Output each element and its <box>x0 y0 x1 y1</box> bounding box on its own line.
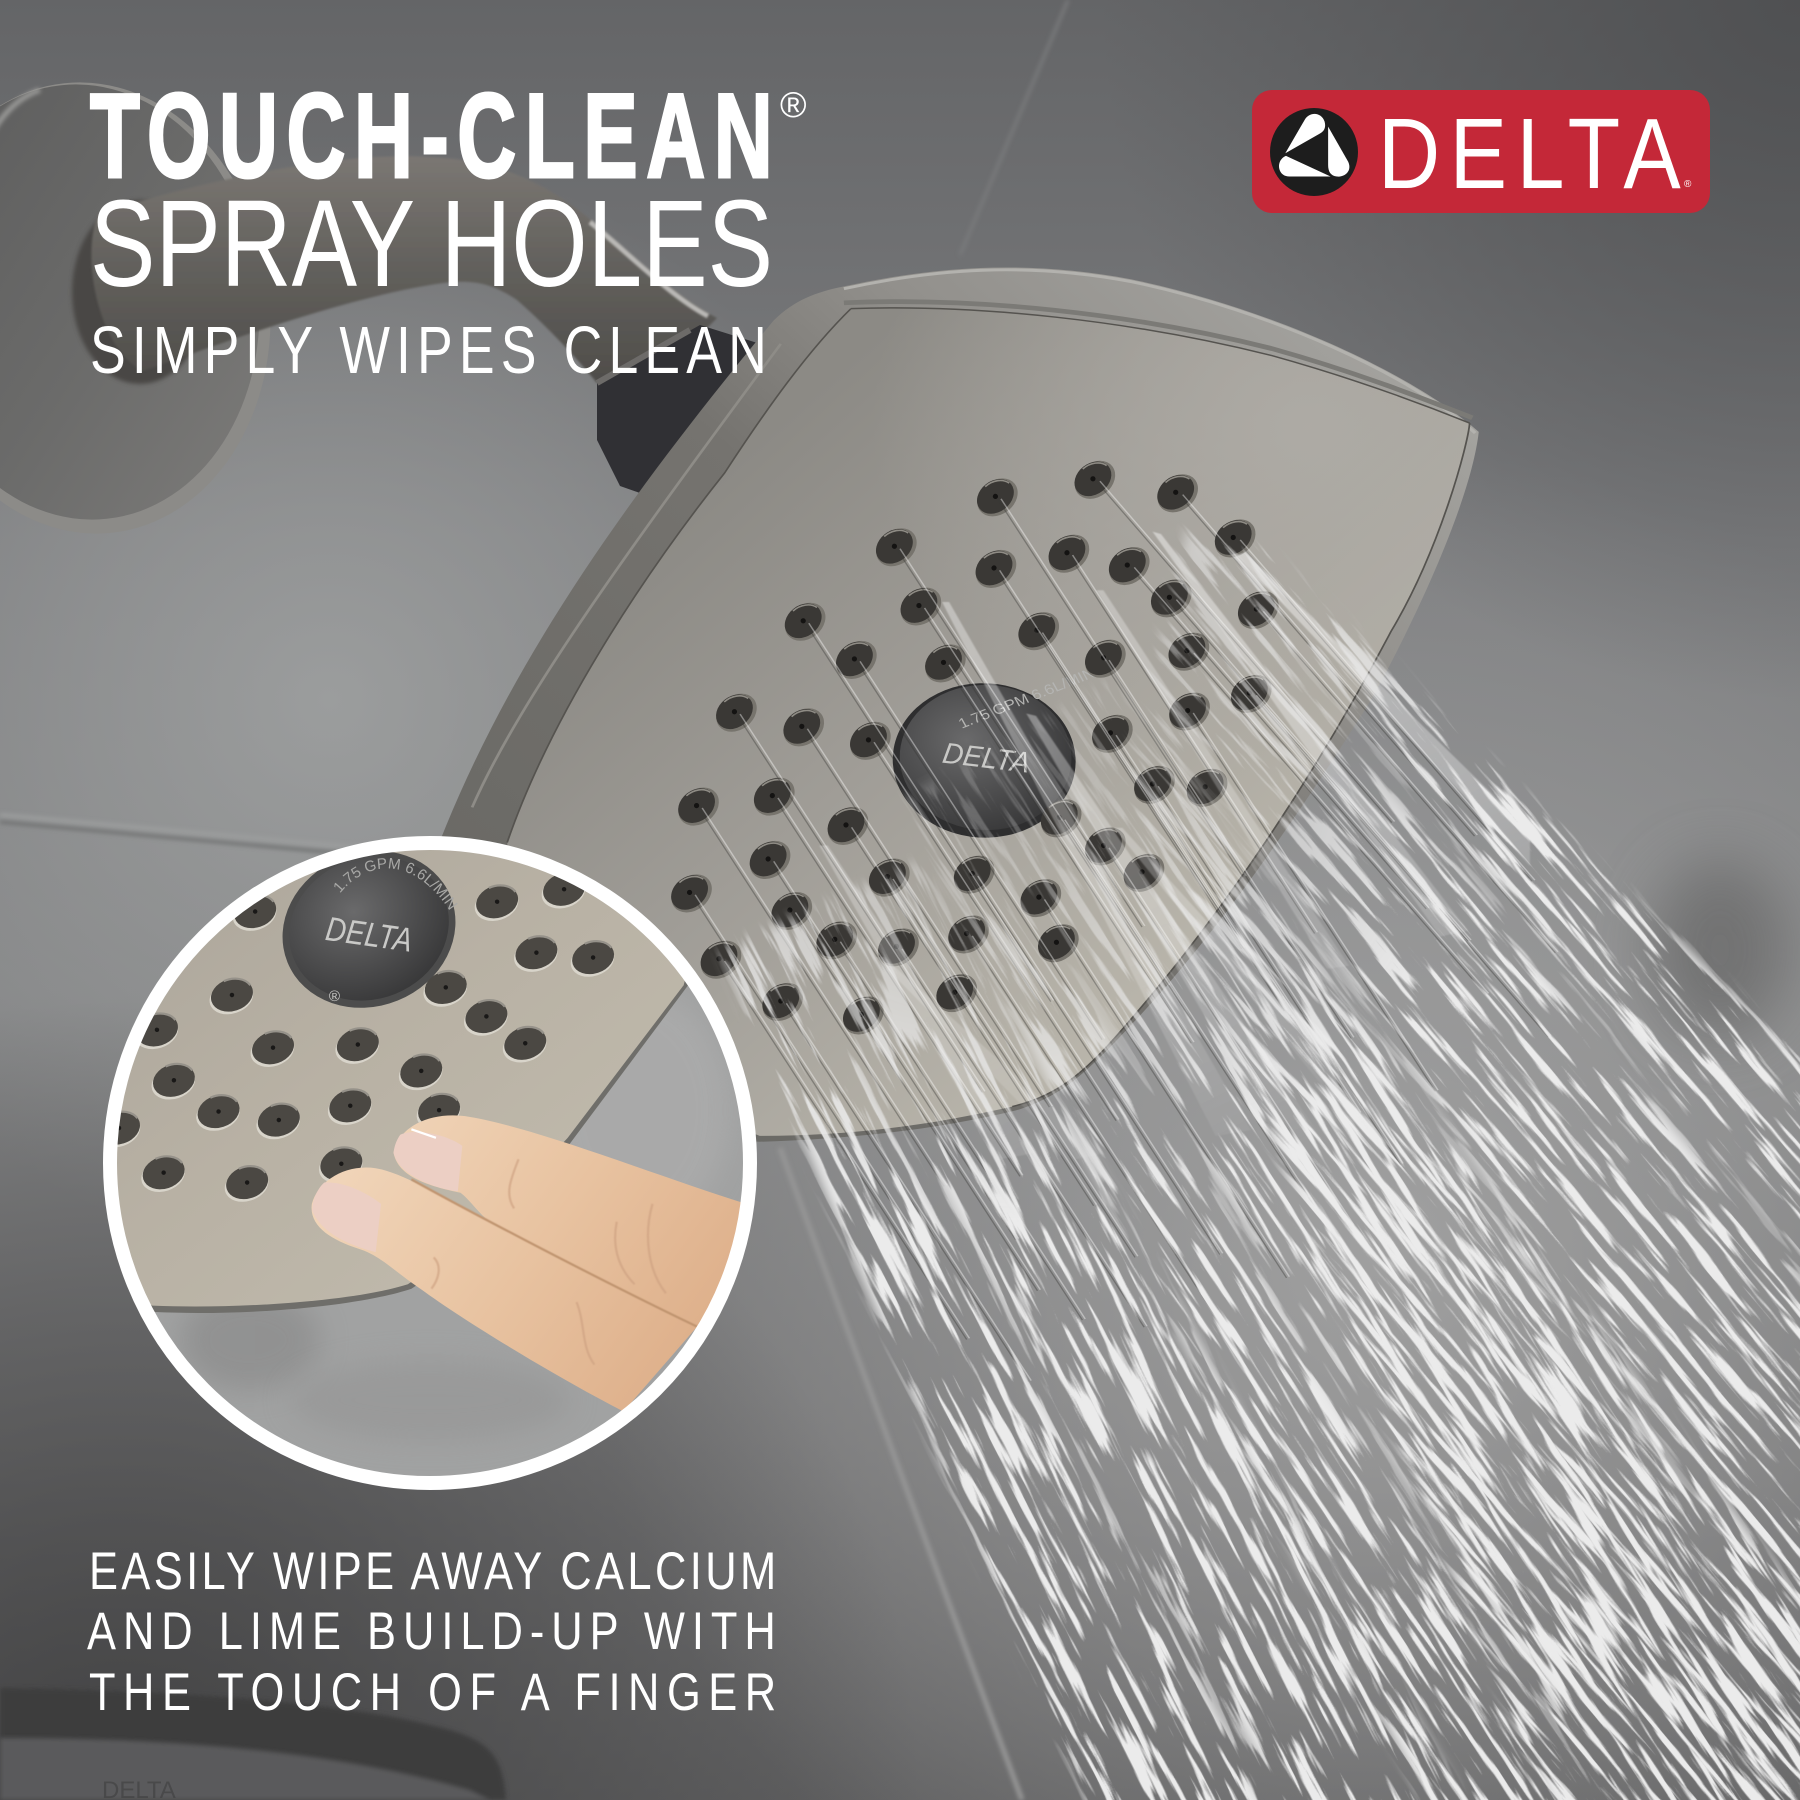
bezel highlights <box>472 270 1475 807</box>
inset spray nozzles <box>92 867 619 1207</box>
subtitle: SIMPLY WIPES CLEAN <box>90 312 767 387</box>
line 3: THE TOUCH OF A FINGER <box>89 1663 776 1722</box>
inset badge <box>282 852 458 1008</box>
line 1: EASILY WIPE AWAY CALCIUM <box>89 1542 776 1601</box>
spray nozzles <box>663 452 1286 1042</box>
inset circle: fingers wiping the spray holes <box>103 836 757 1490</box>
center badge: 1.75 GPM 6.6L/MIN <box>956 666 1098 732</box>
wall flange <box>0 64 293 552</box>
line 2: AND LIME BUILD-UP WITH <box>87 1602 776 1661</box>
description text <box>87 1542 776 1722</box>
shower arm <box>91 156 780 500</box>
inset face plate <box>117 850 688 1313</box>
water spray streaks <box>714 526 1800 1800</box>
head face plate <box>507 308 1470 1136</box>
shower head <box>409 267 1558 1382</box>
inset badge: 1.75 GPM 6.6L/MIN <box>334 858 458 910</box>
center badge <box>862 658 1106 863</box>
tub spout silhouette <box>0 1688 506 1800</box>
inset badge: DELTA <box>323 910 415 960</box>
title line: SPRAY HOLES: SPRAY HOLES <box>90 176 773 313</box>
head bezel <box>409 267 1479 1142</box>
thin water streams near the head <box>819 532 1530 1159</box>
title <box>90 68 807 387</box>
logo emblem <box>1270 108 1358 196</box>
fingers <box>312 1115 746 1411</box>
Delta logo badge <box>1252 90 1710 213</box>
inset badge: ® <box>329 988 340 1005</box>
logo registered mark: ® <box>1684 179 1692 190</box>
registered mark: ® <box>780 84 807 125</box>
logo wordmark: DELTA <box>1378 98 1681 209</box>
title line: TOUCH-CLEAN: TOUCH-CLEAN <box>90 68 773 203</box>
water trails from nozzles <box>692 481 1558 1382</box>
center badge: DELTA <box>940 736 1033 779</box>
